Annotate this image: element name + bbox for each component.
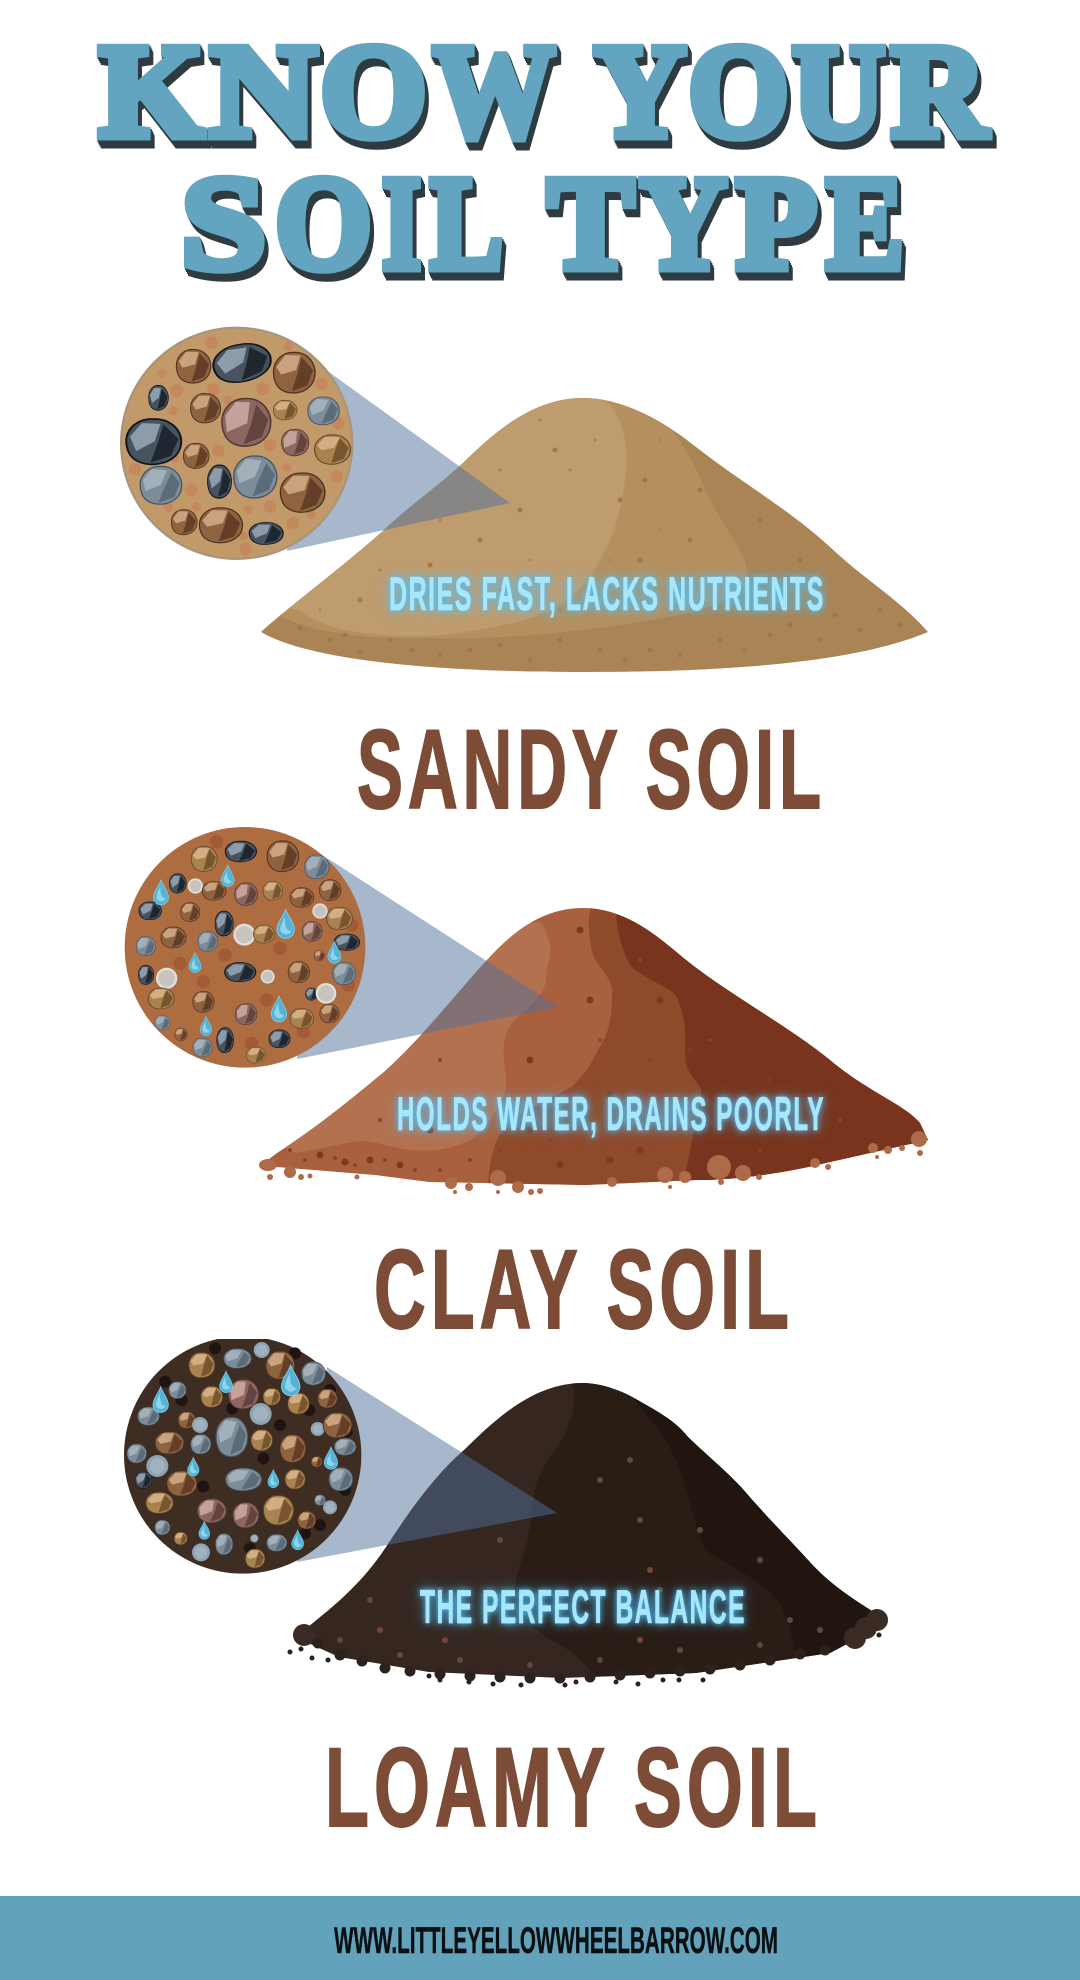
loam pile (290, 1380, 900, 1690)
loam crumbs (304, 1620, 877, 1638)
magnifier cone (297, 1367, 557, 1562)
title line one: KNOW YOUR: N (210, 17, 317, 165)
title line one: KNOW YOUR: U (792, 17, 885, 165)
title line one: KNOW YOUR: Y (594, 17, 686, 165)
magnifier cone (297, 858, 558, 1059)
footer band (0, 1896, 1080, 1980)
pile caption: perfect balance: THE PERFECT BALANCE (420, 1580, 746, 1633)
heading: loamy soil: LOAMY SOIL (325, 1725, 822, 1850)
title line one: KNOW YOUR (99, 17, 988, 165)
title line two: SOIL TYPE (181, 149, 904, 297)
title (99, 17, 988, 297)
heading: clay soil: CLAY SOIL (374, 1227, 794, 1352)
title line two: SOIL TYPE: Y (640, 149, 727, 297)
title line two: SOIL TYPE: P (736, 149, 817, 297)
panel: loamy soil (124, 1336, 900, 1850)
title line two: SOIL TYPE: I (382, 149, 421, 297)
title line one: KNOW YOUR: R (891, 17, 988, 165)
title line two: SOIL TYPE: L (430, 149, 503, 297)
title line one: KNOW YOUR: K (99, 17, 204, 165)
clay pebbles (259, 1131, 927, 1195)
sand pile (250, 380, 928, 672)
clay pile (250, 900, 940, 1195)
title line two: SOIL TYPE: S (181, 149, 266, 297)
panel: sandy soil (120, 327, 928, 832)
magnifier cone (287, 367, 510, 551)
soil close-up circle (120, 327, 353, 560)
title line two: SOIL TYPE: T (547, 149, 634, 297)
title line one: KNOW YOUR: O (320, 17, 427, 165)
soil close-up circle (124, 1336, 361, 1574)
title line two: SOIL TYPE: E (826, 149, 904, 297)
panel: clay soil (125, 827, 940, 1352)
title line one: KNOW YOUR: O (688, 17, 789, 165)
title line one: KNOW YOUR: W (433, 17, 555, 165)
soil close-up circle (125, 827, 365, 1068)
title line two: SOIL TYPE: O (275, 149, 372, 297)
